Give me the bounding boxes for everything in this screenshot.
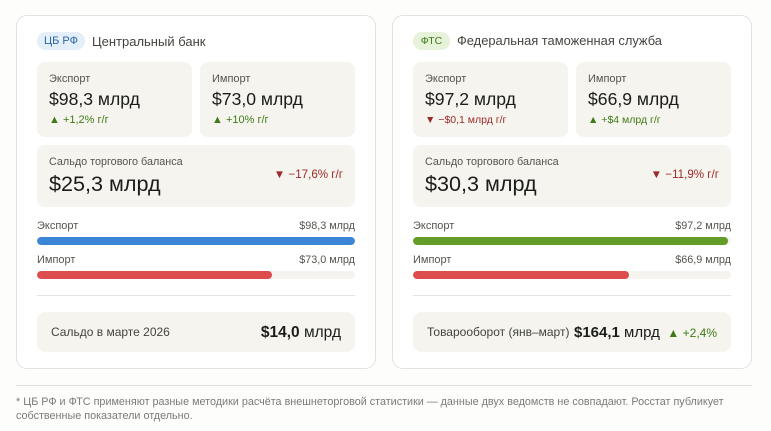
footnote: * ЦБ РФ и ФТС применяют разные методики расчёта внешнеторговой статистики — данные двух ведомств не совпадают. Росстат публикует: [16, 396, 724, 408]
summary: March balance: [37, 312, 355, 352]
label: Сальдо торгового баланса: [49, 156, 183, 168]
stat: import: [200, 62, 355, 137]
bar: import: [413, 271, 731, 279]
bar: export: [413, 237, 731, 245]
value: $98,3 млрд: [49, 89, 140, 109]
summary: turnover: [413, 312, 731, 352]
stat: trade balance: [413, 145, 731, 207]
panel: Federal Customs Service: [392, 15, 752, 369]
value: $30,3 млрд: [425, 171, 537, 196]
change: ▲ +10% г/г: [212, 114, 269, 126]
label: Сальдо торгового баланса: [425, 156, 559, 168]
badge: ЦБ РФ: [37, 32, 85, 50]
stat: export: [413, 62, 568, 137]
change: ▲ +1,2% г/г: [49, 114, 109, 126]
bar value: import: $73,0 млрд: [299, 254, 355, 266]
value: $25,3 млрд: [49, 171, 161, 196]
value: $164,1 млрд: [574, 324, 660, 341]
bar value: export: $98,3 млрд: [299, 220, 355, 232]
label: Импорт: [212, 73, 250, 85]
value: $14,0 млрд: [261, 324, 341, 341]
stat: export: [37, 62, 192, 137]
bar label: import: Импорт: [37, 254, 75, 266]
bar label: import: Импорт: [413, 254, 451, 266]
change: ▲ +2,4%: [667, 326, 717, 340]
stat: import: [576, 62, 731, 137]
change: ▲ +$4 млрд г/г: [588, 114, 661, 126]
label: Товарооборот (янв–март): [427, 325, 569, 339]
value: $97,2 млрд: [425, 89, 516, 109]
panel: Central Bank: [16, 15, 376, 369]
label: Импорт: [588, 73, 626, 85]
bar value: export: $97,2 млрд: [675, 220, 731, 232]
bar label: export: Экспорт: [413, 220, 454, 232]
label: Экспорт: [49, 73, 90, 85]
change: ▼ −17,6% г/г: [274, 168, 343, 181]
change: ▼ −11,9% г/г: [651, 168, 719, 181]
panel title: Федеральная таможенная служба: [457, 33, 662, 48]
label: Сальдо в марте 2026: [51, 325, 170, 339]
badge: ФТС: ФТС: [421, 35, 442, 47]
label: Экспорт: [425, 73, 466, 85]
badge: ФТС: [413, 32, 450, 50]
footnote: [16, 396, 724, 422]
panel title: Центральный банк: [92, 34, 205, 49]
change: ▼ −$0,1 млрд г/г: [425, 114, 506, 126]
value: $66,9 млрд: [588, 89, 679, 109]
badge: ЦБ РФ: ЦБ РФ: [44, 35, 78, 47]
bar value: import: $66,9 млрд: [675, 254, 731, 266]
stat: trade balance: [37, 145, 355, 207]
value: $73,0 млрд: [212, 89, 303, 109]
bar: import: [37, 271, 355, 279]
footnote: собственные показатели отдельно.: [16, 410, 193, 422]
bar label: export: Экспорт: [37, 220, 78, 232]
bar: export: [37, 237, 355, 245]
